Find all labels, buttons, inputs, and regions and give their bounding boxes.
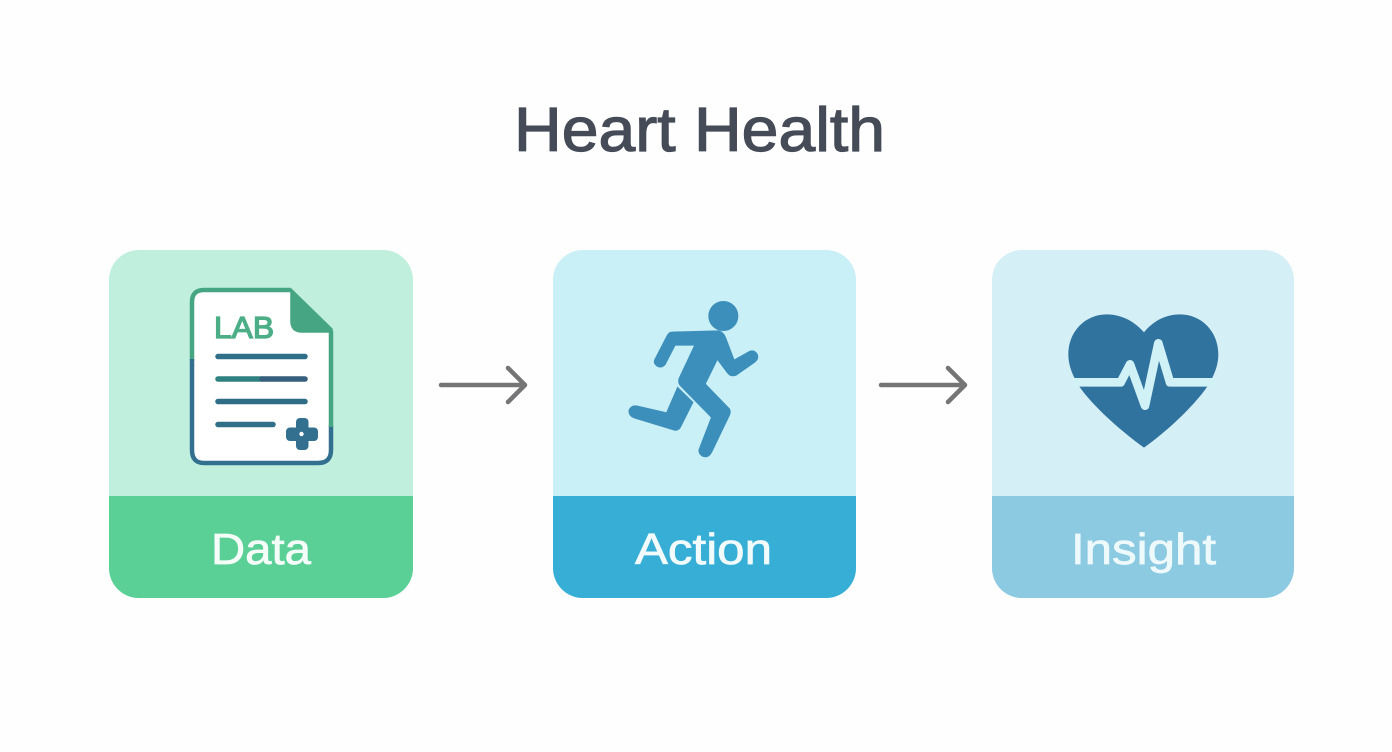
insight card background [992,250,1294,598]
arrow: data to action [441,368,525,402]
panel: action [553,250,856,598]
medical plus [286,418,318,450]
lab label: LAB [214,310,274,345]
insight card footer [992,496,1294,598]
data card background [109,250,413,598]
data label: Data [211,525,312,574]
icon: runner [629,302,758,457]
title: Heart Health [514,96,885,165]
panel: insight [992,250,1294,598]
arrow: action to insight [881,368,965,402]
data card footer [109,496,413,598]
panel: data [109,250,413,598]
icon: lab document [192,289,332,463]
icon: heart with pulse [1068,314,1218,448]
report lines [218,356,305,424]
action card footer [553,496,856,598]
insight label: Insight [1071,525,1216,574]
action card background [553,250,856,598]
action label: Action [635,525,772,574]
